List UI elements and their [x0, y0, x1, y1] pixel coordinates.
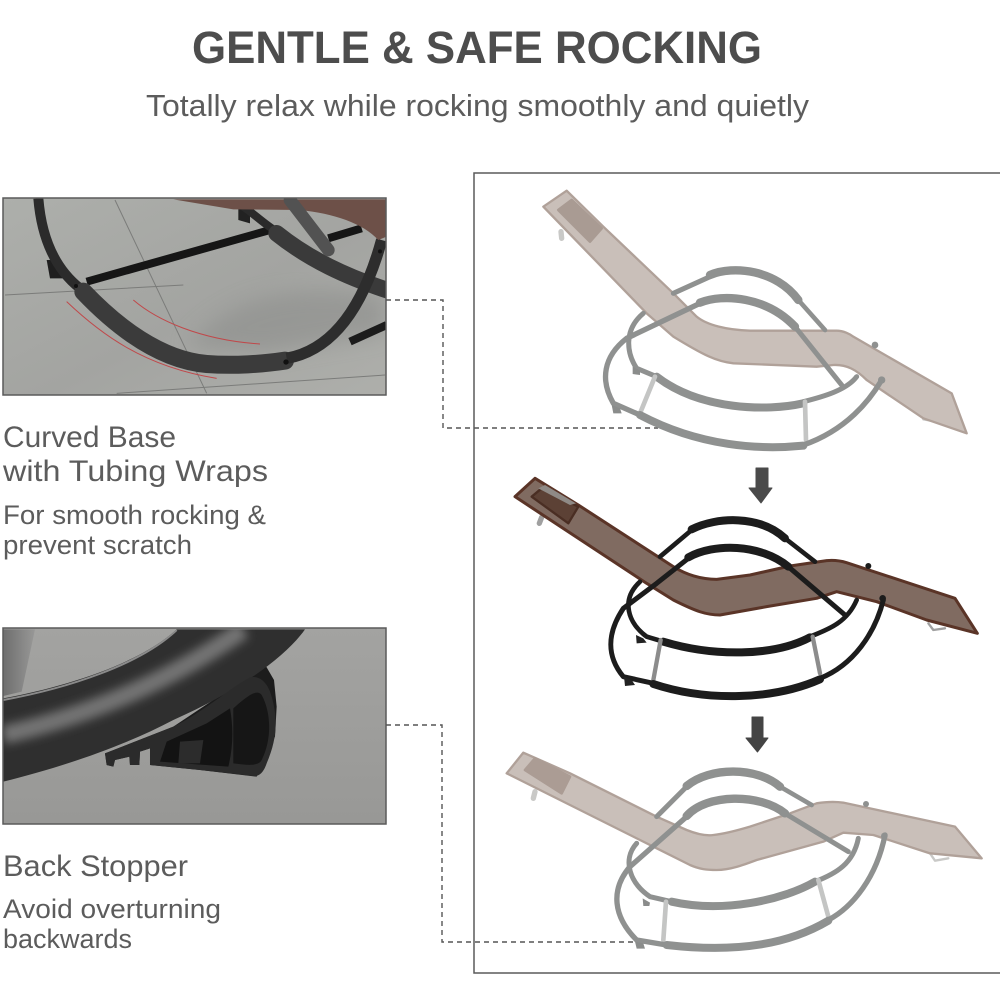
photo frame: curved base	[3, 198, 386, 395]
heading: back stopper: Back Stopper	[3, 850, 188, 883]
chair: centre position	[515, 478, 977, 696]
description: back stopper: Avoid overturning	[3, 894, 221, 924]
arrow: down 2	[746, 717, 768, 752]
description: curved base	[3, 500, 266, 560]
chair: rocked forward (faded)	[507, 753, 982, 949]
description: curved base: prevent scratch	[3, 530, 192, 560]
panel: rocking sequence frame	[474, 173, 1000, 973]
dashed connector: curved base to top chair	[386, 300, 658, 428]
photo: curved base with tubing wraps	[3, 198, 387, 395]
photo frame: back stopper	[3, 628, 386, 824]
title: GENTLE & SAFE ROCKING	[192, 22, 762, 73]
heading: curved base: Curved Base	[3, 421, 176, 454]
dashed connector: back stopper to bottom chair	[386, 725, 636, 942]
heading: curved base	[2, 421, 268, 488]
photo: back stopper	[3, 628, 386, 824]
description: back stopper	[3, 894, 221, 954]
arrow: down 1	[749, 468, 772, 503]
chair: rocked back (faded)	[543, 191, 967, 447]
description: back stopper: backwards	[3, 924, 132, 954]
description: curved base: For smooth rocking &	[3, 500, 266, 530]
subtitle: Totally relax while rocking smoothly and quietly	[146, 88, 810, 123]
heading: curved base: with Tubing Wraps	[2, 455, 268, 488]
